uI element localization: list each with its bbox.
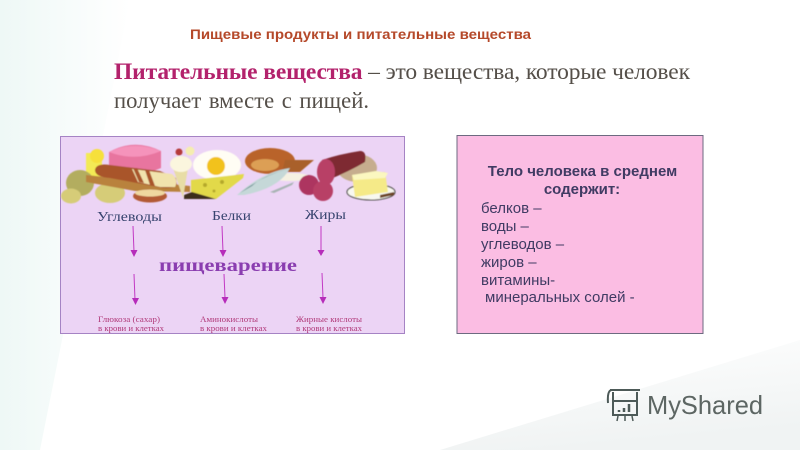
arrow 3 upper <box>318 226 324 256</box>
arrows: upper row <box>130 226 324 257</box>
arrow 2 lower <box>222 274 228 304</box>
heading: proteins: Белки <box>212 209 252 224</box>
label: glucose: в крови и клетках <box>98 324 164 333</box>
icon: bread loaf <box>95 165 177 188</box>
icon: ice cream <box>170 146 194 198</box>
label: glucose <box>98 315 164 333</box>
icon: roast chicken <box>245 148 314 181</box>
logo wordmark: MyShared <box>647 390 763 420</box>
heading: carbohydrates: Углеводы <box>97 210 163 225</box>
composition list: минеральных солей - <box>485 289 635 306</box>
icon: potatoes <box>61 170 125 204</box>
arrow 1 upper <box>130 226 138 257</box>
heading: fats: Жиры <box>305 208 347 223</box>
definition text <box>114 59 691 114</box>
icon: presentation board <box>608 390 640 421</box>
label: fatty acids: в крови и клетках <box>296 324 362 333</box>
arrow 1 lower <box>132 274 139 305</box>
composition list <box>481 200 635 306</box>
label: glucose: Глюкоза (сахар) <box>98 315 160 324</box>
label: fatty acids: Жирные кислоты <box>296 315 363 324</box>
composition list: жиров – <box>481 254 537 271</box>
composition list: воды – <box>481 218 530 235</box>
composition list: витамины- <box>481 272 555 289</box>
title: Пищевые продукты и питательные вещества <box>190 26 531 42</box>
panel heading <box>488 163 677 198</box>
icon: cake <box>109 145 161 174</box>
icon: food illustration <box>61 145 395 204</box>
definition text: Питательные вещества – это вещества, которые человек <box>114 59 691 85</box>
icon: plate shadow <box>337 154 377 182</box>
panel heading: содержит: <box>544 181 620 198</box>
label: fatty acids <box>296 315 363 333</box>
icon: butter on plate <box>347 171 395 200</box>
icon: fish <box>237 168 294 195</box>
composition list: белков – <box>481 200 542 217</box>
arrows: lower row <box>132 273 326 305</box>
icon: bread board <box>86 175 190 192</box>
icon: lemon drink <box>86 149 104 183</box>
label: amino acids: в крови и клетках <box>200 324 267 333</box>
label: amino acids <box>200 315 267 333</box>
icon: bread slice <box>133 190 167 202</box>
icon: sausage <box>299 151 365 201</box>
logo: MyShared <box>608 390 763 421</box>
label: amino acids: Аминокислоты <box>200 315 259 324</box>
panel: body composition <box>457 136 703 334</box>
heading: digestion: пищеварение <box>159 255 297 275</box>
arrow 2 upper <box>220 226 226 257</box>
arrow 3 lower <box>320 273 326 304</box>
icon: fried egg <box>193 150 241 180</box>
definition text: получает вместе с пищей. <box>114 88 369 114</box>
icon: cheese <box>184 174 244 199</box>
panel heading: Тело человека в среднем <box>488 163 677 180</box>
panel: digestion diagram <box>60 136 404 334</box>
composition list: углеводов – <box>481 236 565 253</box>
